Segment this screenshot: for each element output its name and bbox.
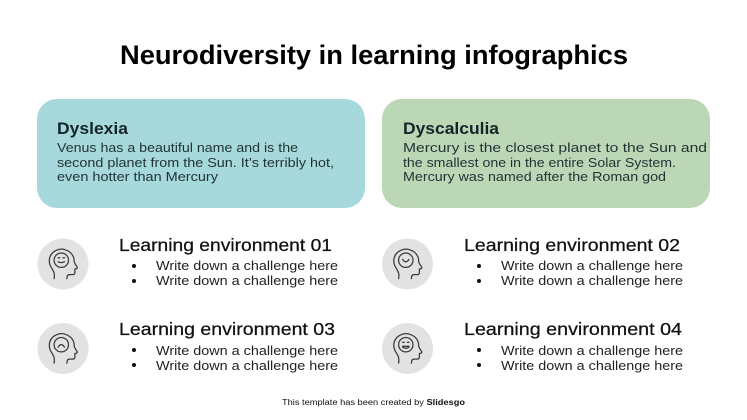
list: challenges 02: Write down a challenge here	[501, 259, 683, 273]
item: Learning environment 02	[382, 235, 683, 290]
list: challenges 04: Write down a challenge here	[501, 344, 683, 358]
text block: Dyscalculia description: the smallest one in the entire Solar System.	[403, 156, 676, 170]
item: Learning environment 03	[38, 319, 338, 374]
heading: Dyslexia: Dyslexia	[57, 119, 129, 138]
text block: Dyslexia description: second planet from the Sun. It’s terribly hot,	[57, 156, 334, 170]
text block: Dyslexia description	[57, 141, 334, 184]
item: Learning environment 04	[382, 319, 683, 374]
list: challenges 01: Write down a challenge here	[156, 259, 338, 273]
footer credit: This template has been created by Slidesgo	[282, 398, 465, 407]
panel: Dyslexia	[37, 99, 365, 208]
text block: Dyscalculia description: Mercury was named after the Roman god	[403, 170, 666, 184]
panel: Dyscalculia	[382, 99, 710, 208]
list: challenges 01: Write down a challenge here	[156, 274, 338, 288]
text block: Dyscalculia description	[403, 141, 707, 184]
text block: Dyscalculia description: Mercury is the closest planet to the Sun and	[403, 141, 707, 155]
list: challenges 02	[477, 259, 683, 288]
item: Learning environment 01	[38, 235, 338, 290]
heading: Learning environment 03: Learning environment 03	[119, 319, 335, 339]
title: Neurodiversity in learning infographics	[120, 40, 628, 70]
heading: Dyscalculia: Dyscalculia	[403, 119, 500, 138]
list: challenges 02: Write down a challenge here	[501, 274, 683, 288]
icon: head with sad face	[38, 323, 88, 374]
icon: head with grinning face	[382, 323, 433, 374]
text block: Dyslexia description: even hotter than Mercury	[57, 170, 219, 184]
list: challenges 03: Write down a challenge here	[156, 344, 338, 358]
heading: Learning environment 04: Learning environment 04	[464, 319, 682, 339]
icon: head with smiling face	[382, 238, 433, 290]
text block: Dyslexia description: Venus has a beautiful name and is the	[57, 141, 298, 155]
list: challenges 03	[132, 344, 338, 373]
heading: Learning environment 02: Learning environment 02	[464, 235, 680, 255]
list: challenges 04	[477, 344, 683, 373]
icon: head with neutral face	[38, 238, 88, 290]
heading: Learning environment 01: Learning environment 01	[119, 235, 332, 255]
list: challenges 03: Write down a challenge here	[156, 359, 338, 373]
list: challenges 01	[132, 259, 338, 288]
list: challenges 04: Write down a challenge here	[501, 359, 683, 373]
